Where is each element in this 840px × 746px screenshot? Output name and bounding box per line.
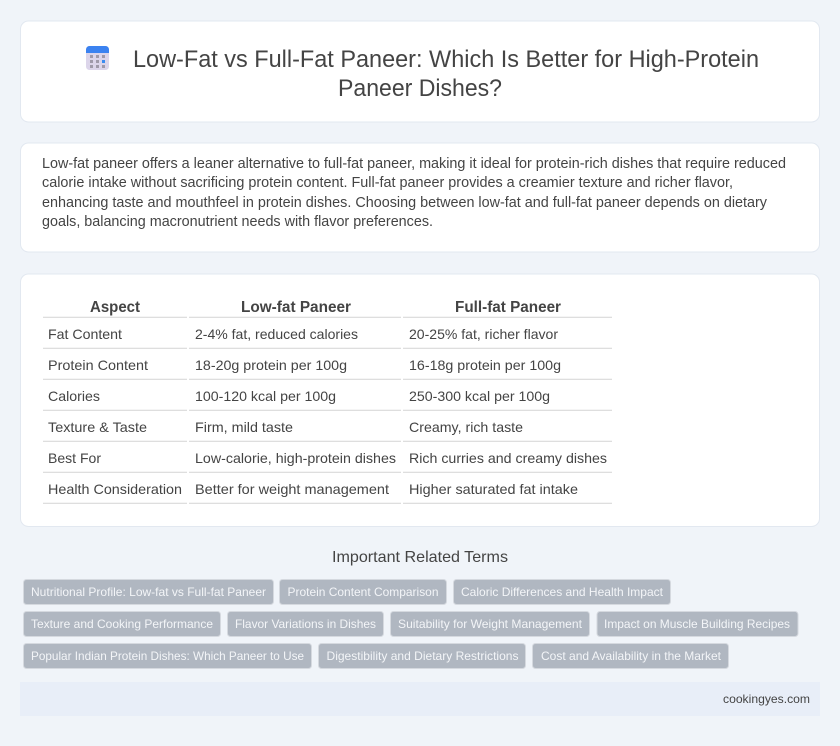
table row: texture and taste <box>48 419 523 435</box>
table row: calories: 100-120 kcal per 100g <box>195 388 336 404</box>
table row: best for: Low-calorie, high-protein dishes <box>195 450 396 466</box>
table row: fat content: Fat Content <box>48 326 122 342</box>
table row: protein content: 16-18g protein per 100g <box>409 357 561 373</box>
text block: summary paragraph: Low-fat paneer offers a leaner alternative to full-fat paneer, making it ideal for protein-rich dishes that require reduced <box>42 156 786 172</box>
table row: best for <box>48 450 607 466</box>
table row: texture and taste: Creamy, rich taste <box>409 419 523 435</box>
tag: muscle building <box>597 612 798 636</box>
table row: calories <box>48 388 550 404</box>
panel: introduction text <box>20 143 820 252</box>
tag: digestibility: Digestibility and Dietary Restrictions <box>326 649 518 663</box>
tag: texture and cooking <box>24 612 220 636</box>
text block: summary paragraph: calorie intake without sacrificing protein content. Full-fat paneer provides a creamier texture and richer flavor, <box>42 175 733 191</box>
panel: comparison table <box>20 274 820 526</box>
tag: popular dishes: Popular Indian Protein Dishes: Which Paneer to Use <box>31 649 304 663</box>
tag: popular dishes <box>24 644 312 668</box>
table row: texture and taste: Texture & Taste <box>48 419 147 435</box>
tag: caloric differences <box>454 580 670 604</box>
table row: best for: Rich curries and creamy dishes <box>409 450 607 466</box>
table row: fat content <box>48 326 558 342</box>
tag: caloric differences: Caloric Differences and Health Impact <box>461 585 664 599</box>
text block: summary paragraph: enhancing taste and mouthfeel in protein dishes. Choosing between low-fat and full-fat paneer depends on dietary <box>42 195 768 211</box>
table row: protein content <box>48 357 561 373</box>
table header row <box>90 299 561 316</box>
title: Low-Fat vs Full-Fat Paneer: Which Is Better for High-Protein <box>133 46 759 73</box>
tag: flavor variations: Flavor Variations in Dishes <box>235 617 376 631</box>
table row: fat content: 2-4% fat, reduced calories <box>195 326 358 342</box>
tag: protein content comparison <box>280 580 446 604</box>
table row: health consideration: Higher saturated fat intake <box>409 481 578 497</box>
table header row: Aspect <box>90 299 141 316</box>
icon: calendar <box>86 46 109 70</box>
panel: title card <box>20 21 820 122</box>
table row: health consideration: Better for weight management <box>195 481 389 497</box>
footer <box>20 682 820 716</box>
tag: nutritional profile <box>24 580 274 604</box>
tag: nutritional profile: Nutritional Profile: Low-fat vs Full-fat Paneer <box>31 585 266 599</box>
tag: protein content comparison: Protein Content Comparison <box>288 585 438 599</box>
heading: important related terms: Important Related Terms <box>332 549 508 566</box>
title: Paneer Dishes? <box>338 75 502 102</box>
tag: digestibility <box>318 644 526 668</box>
tag: weight management <box>390 612 590 636</box>
table row: texture and taste: Firm, mild taste <box>195 419 293 435</box>
text block: summary paragraph <box>42 156 786 230</box>
tag: weight management: Suitability for Weight Management <box>398 617 583 631</box>
table row: health consideration <box>48 481 578 497</box>
tag: cost and availability: Cost and Availability in the Market <box>541 649 722 663</box>
table row: protein content: 18-20g protein per 100g <box>195 357 347 373</box>
title <box>133 46 759 102</box>
table row: protein content: Protein Content <box>48 357 148 373</box>
table row: calories: 250-300 kcal per 100g <box>409 388 550 404</box>
table header row: Low-fat Paneer <box>241 299 351 316</box>
tag: texture and cooking: Texture and Cooking Performance <box>31 617 213 631</box>
table row: fat content: 20-25% fat, richer flavor <box>409 326 558 342</box>
table header row: Full-fat Paneer <box>455 299 561 316</box>
footer: cookingyes.com <box>723 692 810 706</box>
table row: best for: Best For <box>48 450 101 466</box>
tag: muscle building: Impact on Muscle Building Recipes <box>604 617 790 631</box>
table row: calories: Calories <box>48 388 100 404</box>
tag: flavor variations <box>228 612 384 636</box>
panel: related term tags <box>24 580 798 668</box>
table row: health consideration: Health Consideration <box>48 481 182 497</box>
text block: summary paragraph: goals, balancing macronutrient needs with flavor preferences. <box>42 214 433 230</box>
tag: cost and availability <box>532 644 728 668</box>
